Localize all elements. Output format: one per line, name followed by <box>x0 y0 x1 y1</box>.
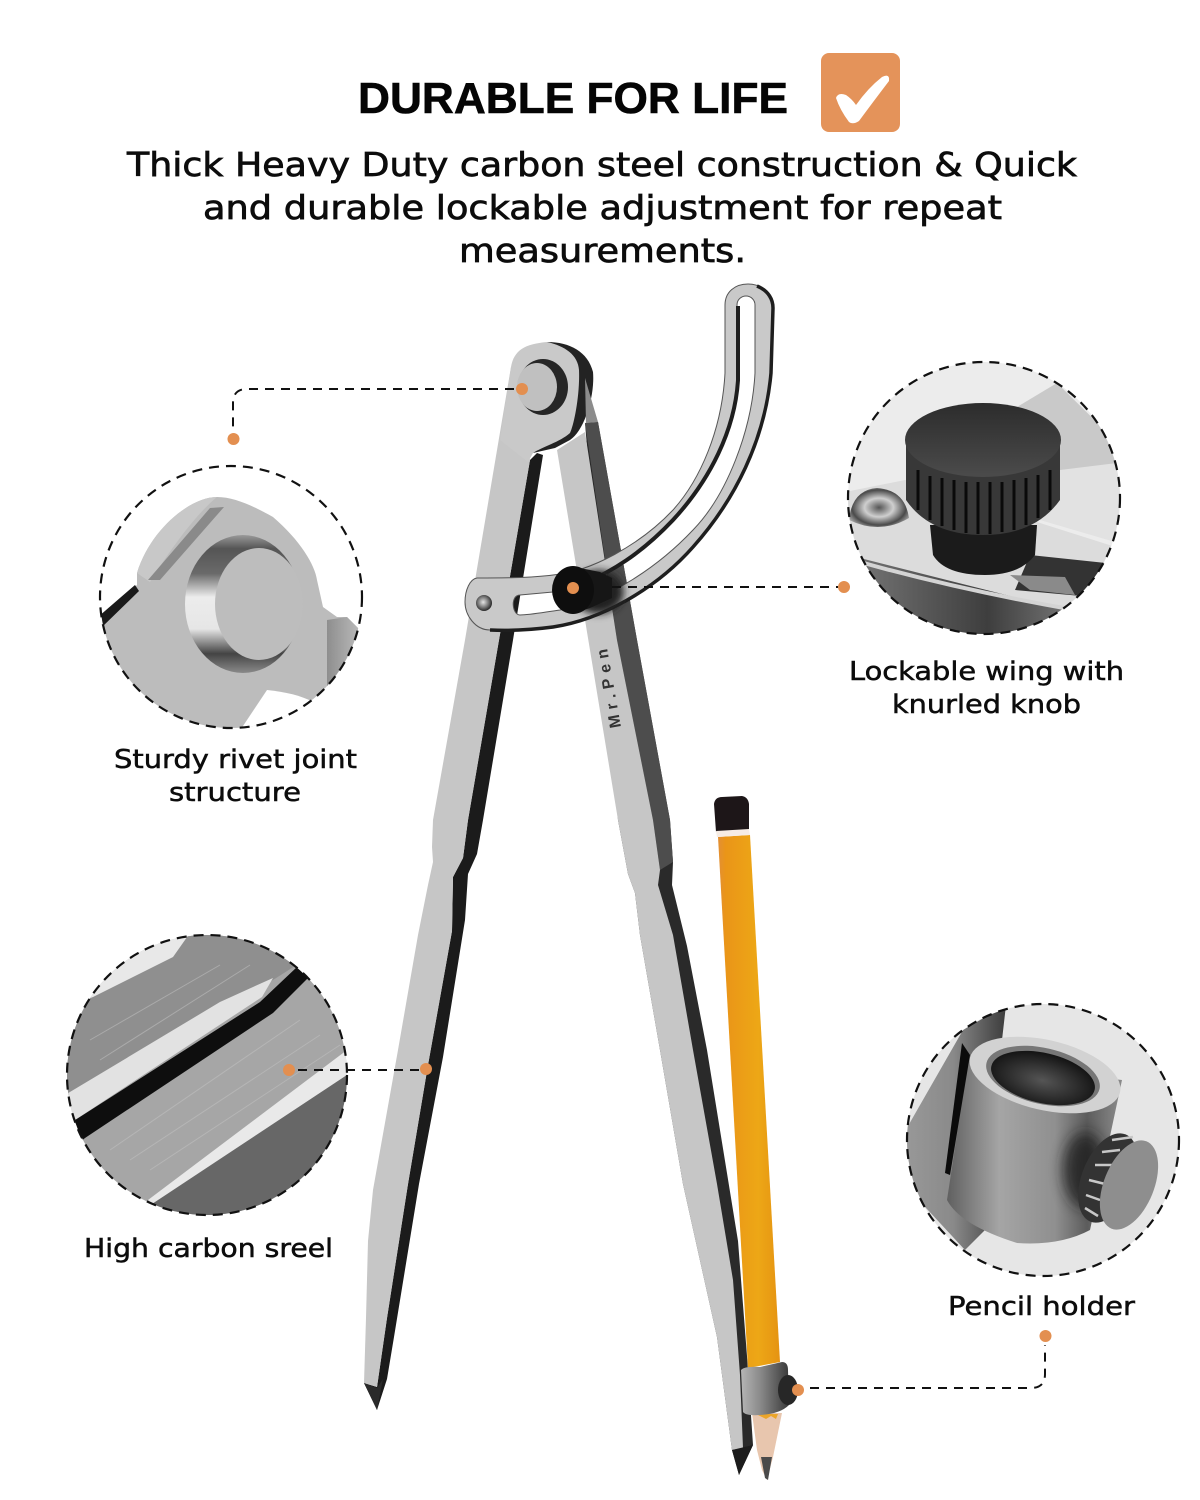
rivet label <box>114 745 357 808</box>
wing label: knurled knob <box>892 690 1081 720</box>
callout: rivet joint <box>90 383 528 808</box>
panel: pencil holder detail <box>900 1000 1190 1285</box>
subtitle text block <box>126 145 1078 270</box>
pencil holder collar <box>741 1362 798 1415</box>
knob top <box>905 403 1061 477</box>
callout: high carbon steel <box>60 930 432 1264</box>
wing label: Lockable wing with <box>849 657 1124 687</box>
holder label: Pencil holder <box>948 1292 1136 1322</box>
icon: orange check box <box>821 53 900 132</box>
knob side <box>906 438 1060 535</box>
thumb screw <box>1078 1133 1158 1230</box>
wing label <box>849 657 1124 720</box>
cylinder top ring <box>970 1036 1120 1114</box>
right leg <box>557 422 753 1475</box>
engraved brand mark: Mr.Pen <box>594 648 625 729</box>
panel: steel detail <box>60 930 360 1220</box>
rivet label: structure <box>169 778 301 808</box>
rivet label: Sturdy rivet joint <box>114 745 357 775</box>
wing arc <box>465 284 773 630</box>
subtitle text block: Thick Heavy Duty carbon steel construction & Quick <box>126 145 1078 184</box>
callout: pencil holder <box>792 1000 1190 1396</box>
wing knob <box>552 566 624 614</box>
steel label: High carbon sreel <box>84 1234 333 1264</box>
cylinder body <box>947 1063 1122 1243</box>
wing hole <box>476 595 492 611</box>
pencil tip <box>752 1413 782 1480</box>
steel connector <box>283 1063 432 1076</box>
pivot head <box>500 342 598 462</box>
holder connector <box>792 1330 1052 1396</box>
callout: lockable wing <box>567 355 1130 720</box>
panel: rivet detail <box>90 466 362 740</box>
knob neck <box>930 525 1037 575</box>
subtitle text block: and durable lockable adjustment for repeat <box>203 188 1002 227</box>
left leg <box>364 367 543 1410</box>
title: durable for life: DURABLE FOR LIFE <box>358 74 788 123</box>
rivet connector <box>228 383 528 445</box>
pencil <box>714 796 798 1480</box>
ball detail <box>849 488 909 527</box>
compass illustration <box>364 284 798 1480</box>
panel: knurled knob detail <box>846 360 1122 636</box>
wing connector <box>567 581 850 594</box>
subtitle text block: measurements. <box>459 231 746 270</box>
